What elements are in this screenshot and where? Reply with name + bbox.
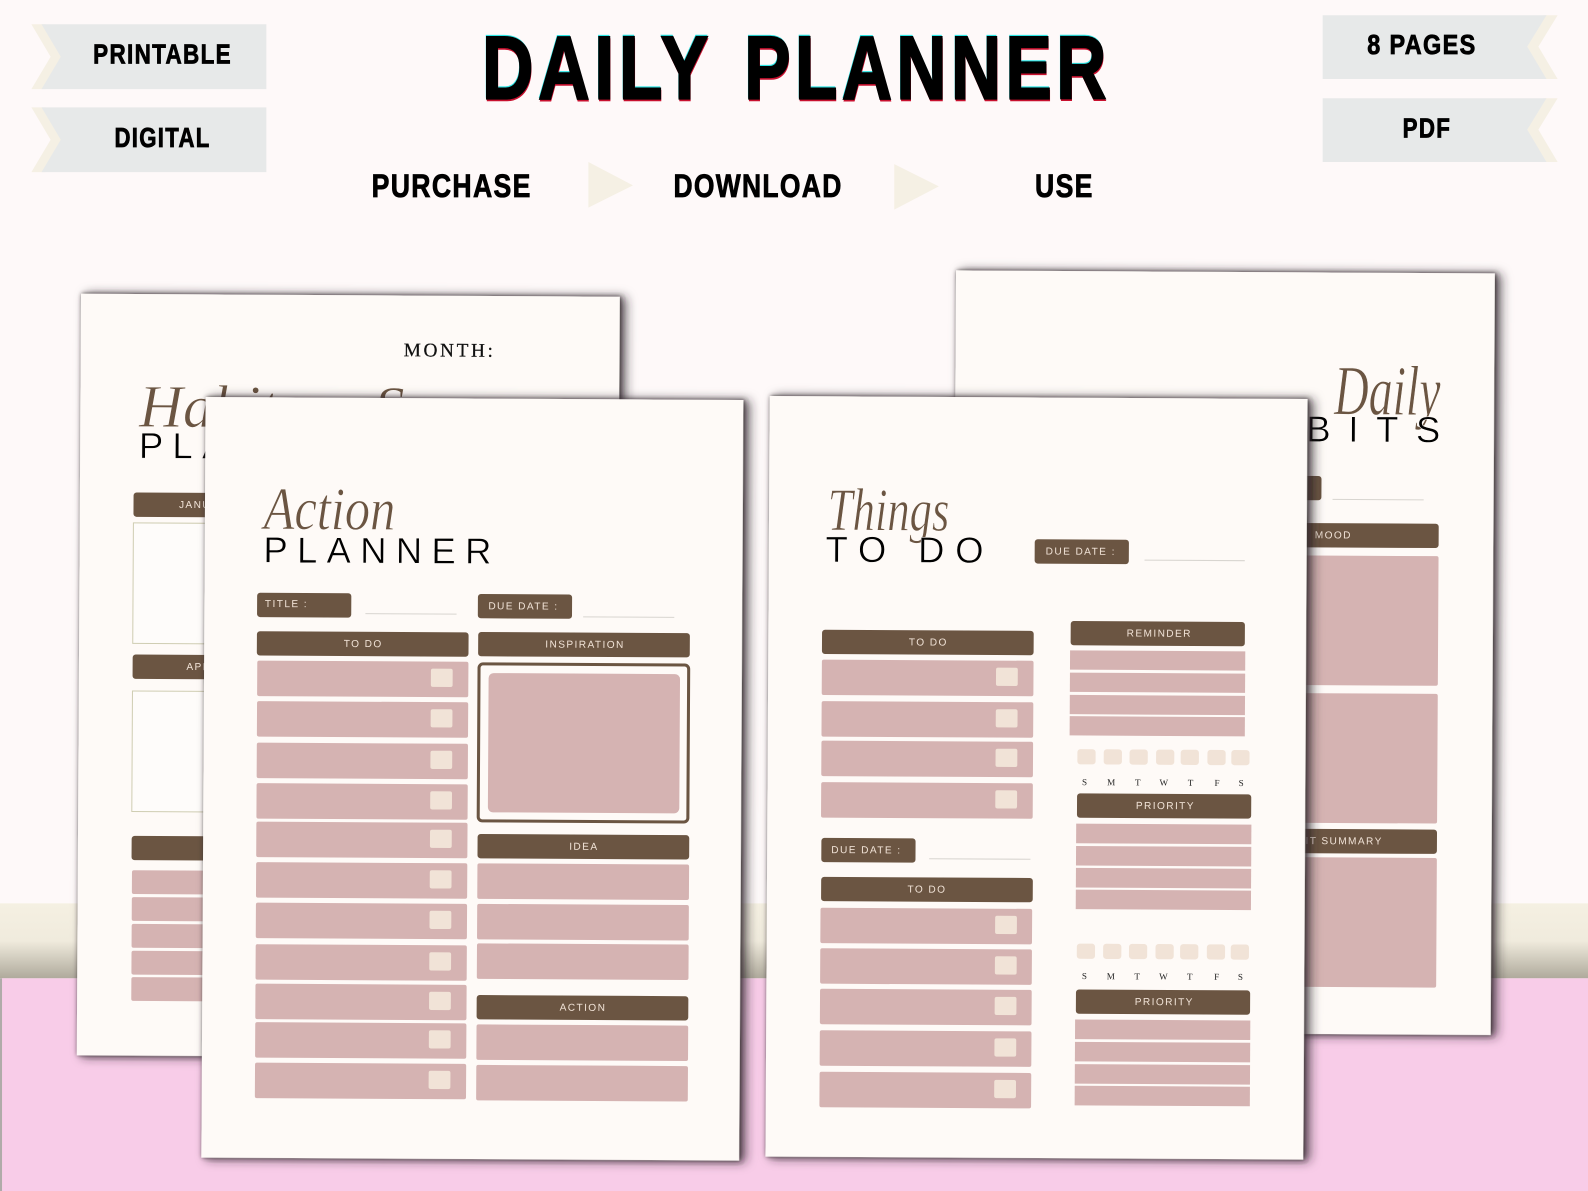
action rows (476, 1024, 688, 1102)
inspiration header: INSPIRATION (545, 640, 625, 651)
ribbon: digital: DIGITAL (114, 122, 211, 153)
inspiration frame (478, 664, 689, 822)
priority rows two (1075, 1020, 1250, 1106)
weekday letters two (1082, 971, 1243, 982)
due date pill: DUE DATE : (488, 601, 559, 613)
due date pill (1035, 539, 1129, 564)
weekday letters two: W (1159, 971, 1168, 982)
weekday letters two: T (1134, 971, 1140, 981)
weekday letters two: M (1107, 971, 1115, 981)
script heading: Habit (138, 374, 280, 441)
title pill: TITLE : (265, 599, 308, 610)
weekday letters one: F (1215, 778, 1220, 788)
due date pill (478, 594, 572, 619)
notes rows (131, 870, 343, 1002)
ribbon: pdf: PDF (1403, 112, 1451, 143)
panel: habit planner page (back left) (77, 294, 620, 1058)
to do header one (822, 630, 1034, 655)
title: DAILY (482, 16, 712, 116)
panel: daily habits page (back right) (952, 270, 1495, 1035)
due date line two (929, 858, 1030, 860)
weekday letters one: S (1082, 777, 1087, 787)
mood header (1228, 523, 1439, 548)
weekday letters one: S (1239, 778, 1244, 788)
weekday letters two: T (1187, 972, 1193, 982)
weekday letters one: M (1107, 777, 1115, 787)
due date line (1145, 559, 1245, 562)
april box (132, 691, 343, 813)
april header: APRIL (186, 662, 223, 673)
reminder header: REMINDER (1127, 628, 1192, 640)
to do rows (255, 661, 468, 1099)
planner heading: PLANNER (263, 529, 491, 572)
weekday letters one: W (1159, 778, 1169, 788)
title: PLANNER (744, 16, 1110, 116)
title line (365, 613, 457, 615)
arrow: purchase to download (588, 162, 633, 208)
weekday letters one: T (1135, 777, 1141, 787)
january header: JANUARY (179, 500, 236, 511)
step: download: DOWNLOAD (673, 168, 843, 204)
weekday letters two: S (1238, 972, 1243, 982)
weekday letters one (1082, 777, 1244, 788)
title: DAILY (482, 18, 713, 118)
weekday letters two: F (1214, 972, 1219, 982)
due date pill two: DUE DATE : (831, 845, 902, 856)
due date line (583, 616, 674, 618)
step: use: USE (1035, 168, 1094, 204)
mood block two (1226, 693, 1438, 824)
script heading: Action (260, 476, 396, 544)
to do rows two (819, 908, 1032, 1108)
priority header one: PRIORITY (1136, 801, 1195, 812)
ribbon: 8 pages (1323, 15, 1558, 79)
floor left edge (0, 978, 2, 1191)
script heading: Daily (1333, 352, 1441, 431)
weekday letters two: S (1082, 971, 1087, 981)
priority header one (1077, 793, 1251, 819)
weekday boxes two (1077, 944, 1249, 960)
to do header two (821, 877, 1033, 902)
step: purchase: PURCHASE (372, 168, 532, 204)
to do header: TO DO (344, 639, 383, 650)
summary block (1225, 857, 1437, 988)
habit summary header: HABIT SUMMARY (1280, 836, 1383, 847)
title: DAILY (483, 19, 713, 119)
arrow: download to use (894, 164, 939, 210)
panel: things to do page (765, 396, 1307, 1160)
ribbon: printable (31, 24, 266, 89)
title pill (257, 593, 351, 618)
ribbon: 8 pages: 8 PAGES (1367, 29, 1477, 60)
due date pill two (821, 838, 916, 863)
script heading: Things (828, 477, 950, 545)
panel: action planner page (201, 397, 743, 1161)
ribbon: digital (31, 107, 266, 172)
idea header (477, 834, 689, 859)
january box (133, 523, 344, 645)
april header (133, 655, 343, 680)
priority header two: PRIORITY (1135, 997, 1194, 1008)
priority rows one (1076, 824, 1251, 910)
script heading second word: Summary (374, 375, 604, 443)
date pill (1227, 475, 1322, 500)
to do heading: TO DO (825, 529, 984, 571)
pink floor (0, 978, 1588, 1191)
idea rows (477, 863, 689, 980)
habits heading: HABITS (1220, 408, 1440, 450)
to do rows one (821, 660, 1034, 819)
beige band (0, 903, 1588, 978)
january header (133, 492, 344, 518)
title (482, 16, 1111, 119)
mood block one (1227, 555, 1439, 686)
idea header: IDEA (569, 842, 599, 853)
weekday boxes one (1077, 749, 1250, 765)
mood header: MOOD (1315, 530, 1352, 541)
action header: ACTION (560, 1003, 606, 1014)
to do header one: TO DO (909, 637, 948, 649)
to do header two: TO DO (907, 885, 946, 896)
habit summary header (1226, 828, 1437, 854)
ribbon: printable: PRINTABLE (93, 38, 232, 69)
date line (1333, 498, 1424, 501)
reminder header (1071, 621, 1245, 646)
reminder rows (1070, 650, 1245, 736)
priority header two (1076, 989, 1250, 1015)
planner heading: PLANNER (139, 425, 367, 467)
due date pill: DUE DATE : (1046, 547, 1116, 558)
month label: MONTH: (404, 340, 493, 362)
weekday letters one: T (1188, 778, 1194, 788)
inspiration header (478, 632, 690, 657)
to do header (257, 631, 469, 657)
title: PLANNER (744, 18, 1111, 118)
notes header (132, 836, 342, 861)
ribbon: pdf (1323, 98, 1558, 162)
title: PLANNER (745, 19, 1111, 119)
action header (477, 995, 688, 1021)
